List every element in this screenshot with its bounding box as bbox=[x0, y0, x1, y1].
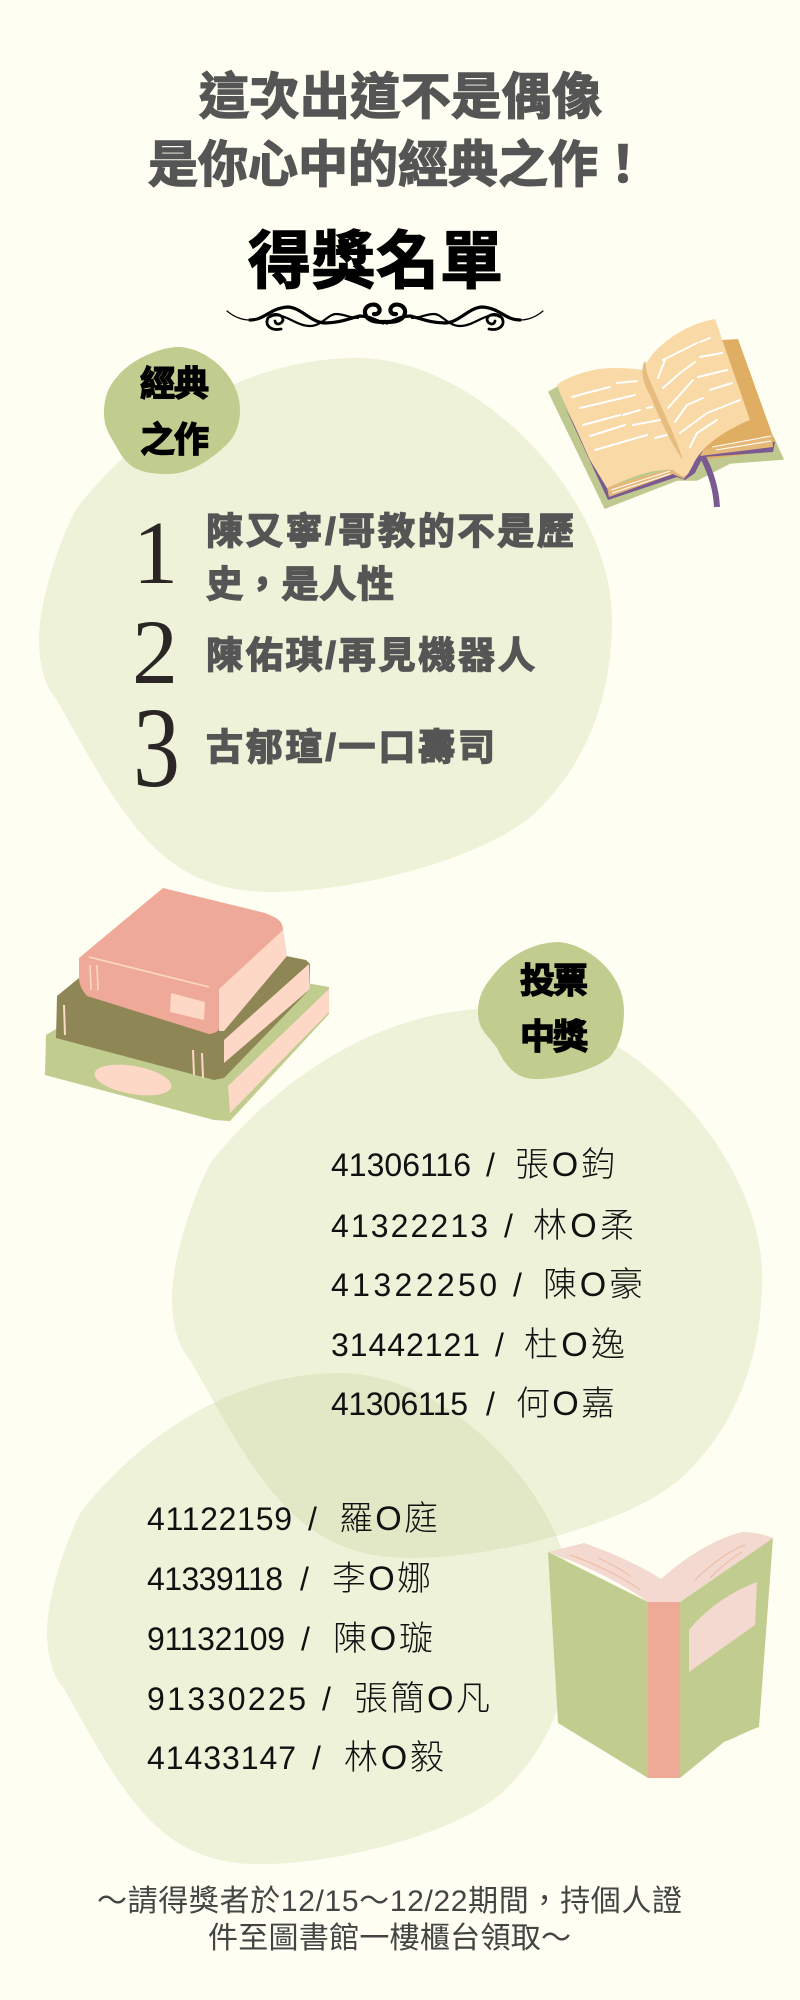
list: vote winners group one: 陳O豪 bbox=[543, 1266, 643, 1304]
list: vote winners group one bbox=[331, 1146, 643, 1423]
badge: vote winners: 投票 bbox=[520, 962, 588, 1001]
rank 3: 3 bbox=[133, 684, 180, 811]
rank 2: 陳佑琪/再見機器人 bbox=[206, 635, 535, 676]
list: vote winners group one: / bbox=[486, 1386, 495, 1422]
list: vote winners group one: / bbox=[495, 1327, 504, 1363]
list: vote winners group one: 41322250 bbox=[331, 1267, 497, 1303]
footer note bbox=[97, 1885, 682, 1955]
list: vote winners group two: / bbox=[308, 1501, 317, 1537]
panel: blob vote winners upper bbox=[172, 1008, 762, 1558]
list: vote winners group two: / bbox=[312, 1740, 321, 1776]
list: vote winners group one: 41322213 bbox=[331, 1208, 488, 1244]
list: vote winners group one: 杜O逸 bbox=[524, 1326, 625, 1364]
list: vote winners group two: 林O毅 bbox=[344, 1739, 444, 1777]
rank 1: 史，是人性 bbox=[206, 564, 394, 605]
badge: vote winners bbox=[478, 942, 624, 1079]
rank 2: 2 bbox=[132, 601, 178, 703]
icon: stack of books bbox=[45, 888, 329, 1121]
rank 1: 1 bbox=[133, 504, 178, 603]
ranked list: classic works winners bbox=[132, 504, 574, 811]
heading: award list: 得獎名單 bbox=[248, 227, 503, 297]
icon: standing book bbox=[548, 1532, 773, 1778]
footer note: ～請得獎者於12/15～12/22期間，持個人證 bbox=[97, 1885, 682, 1918]
list: vote winners group two: 羅O庭 bbox=[339, 1500, 438, 1538]
list: vote winners group two: 陳O璇 bbox=[333, 1620, 433, 1658]
list: vote winners group one: / bbox=[504, 1208, 513, 1244]
list: vote winners group two: 41122159 bbox=[147, 1501, 292, 1537]
list: vote winners group two: 91132109 bbox=[147, 1621, 285, 1657]
rank 2 bbox=[132, 601, 535, 703]
list: vote winners group one: / bbox=[513, 1267, 522, 1303]
list: vote winners group two: / bbox=[300, 1561, 309, 1597]
ornament: flourish divider bbox=[227, 305, 543, 329]
list: vote winners group two: 李O娜 bbox=[332, 1560, 431, 1598]
title: 是你心中的經典之作！ bbox=[148, 137, 648, 193]
rank 1: 陳又寧/哥教的不是歷 bbox=[206, 511, 574, 552]
list: vote winners group two: / bbox=[322, 1681, 331, 1717]
rank 1 bbox=[133, 504, 574, 605]
list: vote winners group one: / bbox=[486, 1147, 495, 1183]
title: 這次出道不是偶像 bbox=[199, 69, 602, 125]
list: vote winners group two: 41339118 bbox=[147, 1561, 283, 1597]
badge: classic works bbox=[104, 347, 240, 474]
list: vote winners group one: 41306116 bbox=[331, 1147, 471, 1183]
rank 3: 古郁瑄/一口壽司 bbox=[206, 727, 495, 768]
badge: classic works: 之作 bbox=[140, 421, 209, 460]
list: vote winners group two: 41433147 bbox=[147, 1740, 296, 1776]
list: vote winners group two: 張簡O凡 bbox=[354, 1680, 490, 1718]
footer note: 件至圖書館一樓櫃台領取～ bbox=[208, 1922, 571, 1955]
list: vote winners group two bbox=[147, 1500, 490, 1777]
title bbox=[148, 69, 648, 193]
rank 3 bbox=[133, 684, 495, 811]
list: vote winners group one: 張O鈞 bbox=[515, 1146, 615, 1184]
list: vote winners group two: 91330225 bbox=[147, 1681, 306, 1717]
list: vote winners group one: 何O嘉 bbox=[516, 1385, 615, 1423]
badge: classic works: 經典 bbox=[140, 365, 209, 404]
list: vote winners group one: 41306115 bbox=[331, 1386, 468, 1422]
badge: vote winners: 中獎 bbox=[520, 1018, 588, 1057]
panel: blob classic works bbox=[39, 358, 612, 892]
panel: blob vote winners lower bbox=[47, 1373, 574, 1864]
list: vote winners group one: 林O柔 bbox=[533, 1207, 634, 1245]
icon: open book bbox=[549, 319, 783, 508]
list: vote winners group two: / bbox=[301, 1621, 310, 1657]
list: vote winners group one: 31442121 bbox=[331, 1327, 480, 1363]
